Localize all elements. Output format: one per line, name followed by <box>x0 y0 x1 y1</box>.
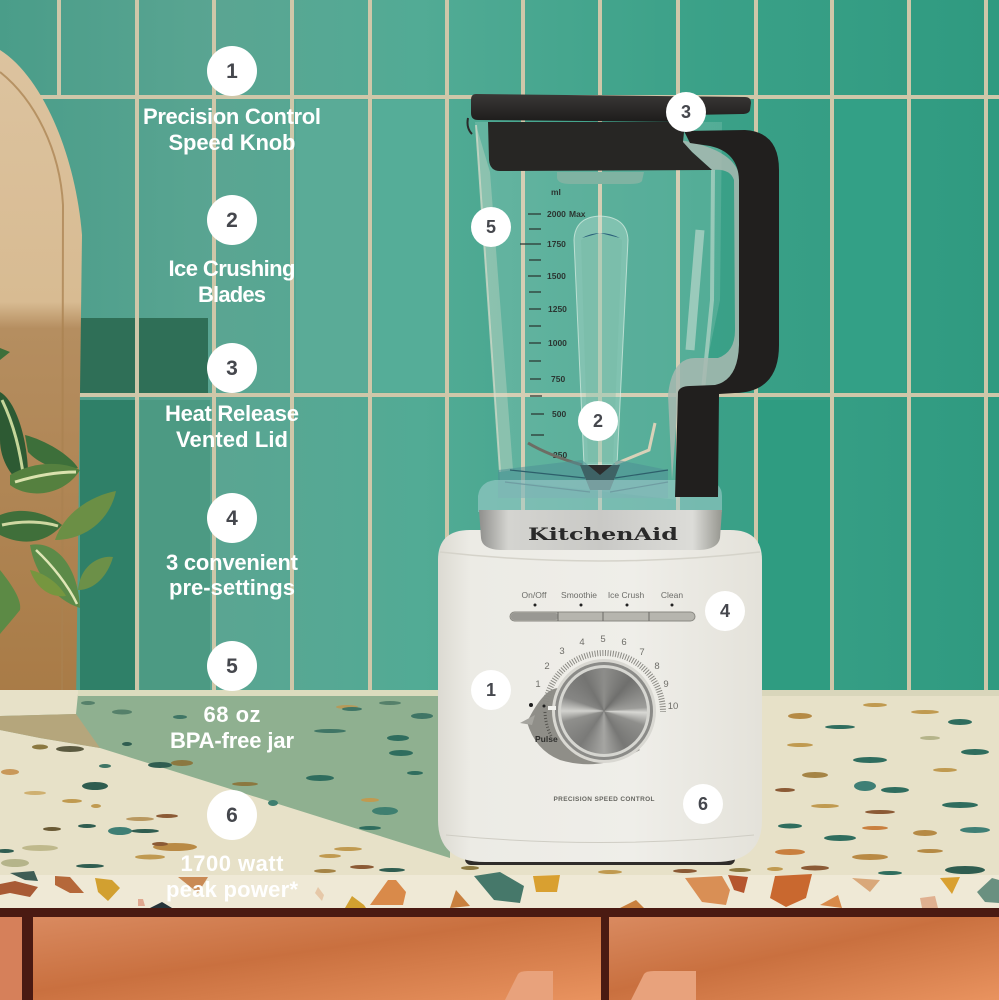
terrazzo countertop <box>0 690 999 909</box>
terrazzo chips <box>0 701 990 875</box>
feature 5: 68 oz <box>204 702 260 727</box>
callout marker: 6 on base: 6 <box>698 794 708 814</box>
preset labels: Clean <box>661 590 683 600</box>
feature 4: 3 convenient <box>166 550 299 575</box>
preset labels: Ice Crush <box>608 590 644 600</box>
jar bottom <box>498 460 668 498</box>
feature 4: pre-settings <box>169 575 295 600</box>
feature 6 <box>166 790 298 902</box>
tiled wall <box>0 0 999 700</box>
blender jar <box>468 94 779 550</box>
volume scale: 1750 <box>547 239 566 249</box>
preset labels: On/Off <box>522 590 547 600</box>
feature 4: 4 <box>226 507 238 530</box>
dial scale: 6 <box>621 637 627 648</box>
volume scale: 500 <box>552 409 566 419</box>
wooden cutting board <box>0 50 82 724</box>
feature 1: Speed Knob <box>168 130 296 155</box>
callout marker: 5 on jar: 5 <box>486 217 496 237</box>
lid lower section <box>488 122 712 171</box>
feature 6: 1700 watt <box>180 851 284 876</box>
dial scale: 8 <box>654 661 660 672</box>
callout marker: 2 on blades <box>578 401 618 441</box>
feature 1 <box>143 46 321 155</box>
feature 5: BPA-free jar <box>170 728 294 753</box>
callout marker: 4 on presets <box>705 591 745 631</box>
volume scale: 250 <box>553 450 567 460</box>
volume scale: 1000 <box>548 338 567 348</box>
callout marker: 3 on lid <box>666 92 706 132</box>
feature 2 <box>168 195 296 307</box>
silver collar <box>479 510 722 550</box>
volume scale: 750 <box>551 374 565 384</box>
feature 3 <box>165 343 299 452</box>
speed knob <box>548 659 656 763</box>
feature 4 <box>166 493 299 600</box>
counter shadow <box>0 694 450 858</box>
feature 5 <box>170 641 294 753</box>
callout marker: 5 on jar <box>471 207 511 247</box>
feature 3: Vented Lid <box>176 427 288 452</box>
feature 3: Heat Release <box>165 401 299 426</box>
dial shadow <box>527 688 640 764</box>
handle <box>675 130 779 497</box>
cabinet handles <box>505 971 553 1000</box>
callout marker: 2 on blades: 2 <box>593 411 603 431</box>
orange cabinets <box>0 908 999 1000</box>
callout marker: 3 on lid: 3 <box>681 102 691 122</box>
dial scale: 2 <box>544 661 550 672</box>
feature 1: Precision Control <box>143 104 321 129</box>
dial scale: 10 <box>668 701 678 712</box>
plant leaves <box>0 348 116 634</box>
dial scale: 7 <box>639 647 645 658</box>
precision speed control label: PRECISION SPEED CONTROL <box>554 796 655 803</box>
counter edge large chips <box>0 871 999 908</box>
volume scale: 1500 <box>547 271 566 281</box>
volume scale: 1250 <box>548 304 567 314</box>
dial scale: 3 <box>559 646 565 657</box>
volume scale: 2000 <box>547 209 566 219</box>
feature 2: 2 <box>226 209 238 232</box>
brand name: KitchenAid <box>528 525 678 545</box>
preset labels: Smoothie <box>561 590 597 600</box>
volume scale <box>520 187 586 460</box>
dial scale: 1 <box>535 679 541 690</box>
feet <box>465 848 735 865</box>
feature 1: 1 <box>226 60 238 83</box>
callout marker: 6 on base <box>683 784 723 824</box>
volume scale: ml <box>551 187 561 197</box>
feature 6: peak power* <box>166 877 298 902</box>
preset button bar <box>510 612 695 621</box>
feature 3: 3 <box>226 357 238 380</box>
preset labels <box>522 590 683 606</box>
centre column <box>574 216 628 465</box>
dial scale <box>529 634 678 744</box>
dial scale: 5 <box>600 634 606 645</box>
jar body <box>475 122 722 500</box>
feature 2: Ice Crushing <box>168 256 296 281</box>
dial scale: 9 <box>663 679 669 690</box>
feature 2: Blades <box>198 282 266 307</box>
callout marker: 1 on knob: 1 <box>486 680 496 700</box>
callout marker: 1 on knob <box>471 670 511 710</box>
lid top <box>471 94 751 122</box>
volume scale: Max <box>569 209 586 219</box>
blender base <box>438 530 762 865</box>
feature 5: 5 <box>226 655 238 678</box>
callout marker: 4 on presets: 4 <box>720 601 730 621</box>
feature 6: 6 <box>226 804 238 827</box>
dial scale: Pulse <box>535 734 558 744</box>
dial scale: 4 <box>579 637 585 648</box>
handle inner band <box>668 140 740 480</box>
blades <box>528 423 655 490</box>
